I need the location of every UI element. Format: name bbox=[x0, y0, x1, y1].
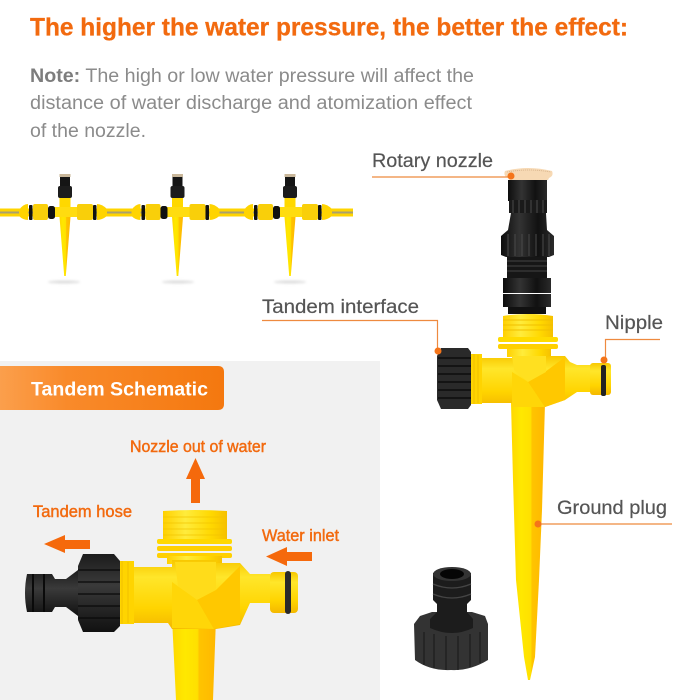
arrow: water inlet bbox=[266, 547, 312, 566]
yellow thread bbox=[498, 314, 558, 357]
top thread bbox=[157, 510, 232, 564]
ground shadows bbox=[48, 280, 306, 284]
tandem interface black cap bbox=[437, 348, 471, 409]
title: The higher the water pressure, the better the effect: bbox=[30, 14, 628, 42]
o-ring bbox=[285, 571, 291, 614]
rotary nozzle cap bbox=[504, 168, 553, 180]
black coupling nut bbox=[78, 554, 120, 632]
callout: rotary nozzle: Rotary nozzle bbox=[372, 151, 493, 172]
callout: nipple bbox=[600, 313, 663, 364]
right nipple bbox=[270, 572, 298, 613]
left thread bbox=[114, 561, 134, 624]
arrow: nozzle out of water bbox=[186, 458, 205, 503]
callout: nipple: Nipple bbox=[605, 313, 663, 334]
tee body bbox=[133, 560, 270, 629]
nipple end with o-ring bbox=[590, 363, 611, 396]
spike bbox=[172, 618, 216, 700]
note text block: distance of water discharge and atomization effect bbox=[30, 93, 473, 114]
heading tab: Tandem Schematic bbox=[0, 366, 224, 410]
hose line bbox=[0, 208, 353, 216]
note text block bbox=[30, 66, 474, 142]
sprinkler 3 bbox=[244, 174, 332, 276]
callout: rotary nozzle bbox=[372, 151, 514, 180]
tee facets bbox=[172, 562, 240, 629]
note text block: of the nozzle. bbox=[30, 121, 146, 142]
black nipple bbox=[25, 570, 78, 616]
callout: ground plug: Ground plug bbox=[557, 498, 667, 519]
heading tab: Tandem Schematic: Tandem Schematic bbox=[31, 380, 208, 400]
tandem sprinkler row illustration bbox=[0, 174, 353, 284]
main sprinkler product bbox=[437, 168, 611, 680]
callout: ground plug bbox=[534, 498, 672, 528]
label: tandem hose: Tandem hose bbox=[33, 503, 132, 521]
nozzle head black body bbox=[501, 180, 554, 314]
schematic sprinkler close-up bbox=[25, 510, 298, 700]
note text block: Note: The high or low water pressure will affect the bbox=[30, 66, 474, 87]
arrow: tandem hose bbox=[44, 535, 90, 553]
ground spike bbox=[511, 403, 545, 680]
panel: tandem schematic background bbox=[0, 361, 380, 700]
sprinkler 2 bbox=[132, 174, 220, 276]
tee facets bbox=[512, 356, 565, 407]
left collar bbox=[469, 354, 482, 404]
sprinkler 1 bbox=[19, 174, 107, 276]
tee body bbox=[480, 356, 595, 407]
black hose adapter bbox=[414, 567, 488, 670]
adapter mouth bbox=[433, 567, 471, 581]
label: water inlet: Water inlet bbox=[262, 527, 339, 545]
adapter base bbox=[414, 612, 488, 670]
label: nozzle out of water: Nozzle out of water bbox=[130, 438, 266, 456]
adapter neck bbox=[430, 573, 473, 633]
callout: tandem interface: Tandem interface bbox=[262, 297, 419, 318]
callout: tandem interface bbox=[262, 297, 442, 354]
